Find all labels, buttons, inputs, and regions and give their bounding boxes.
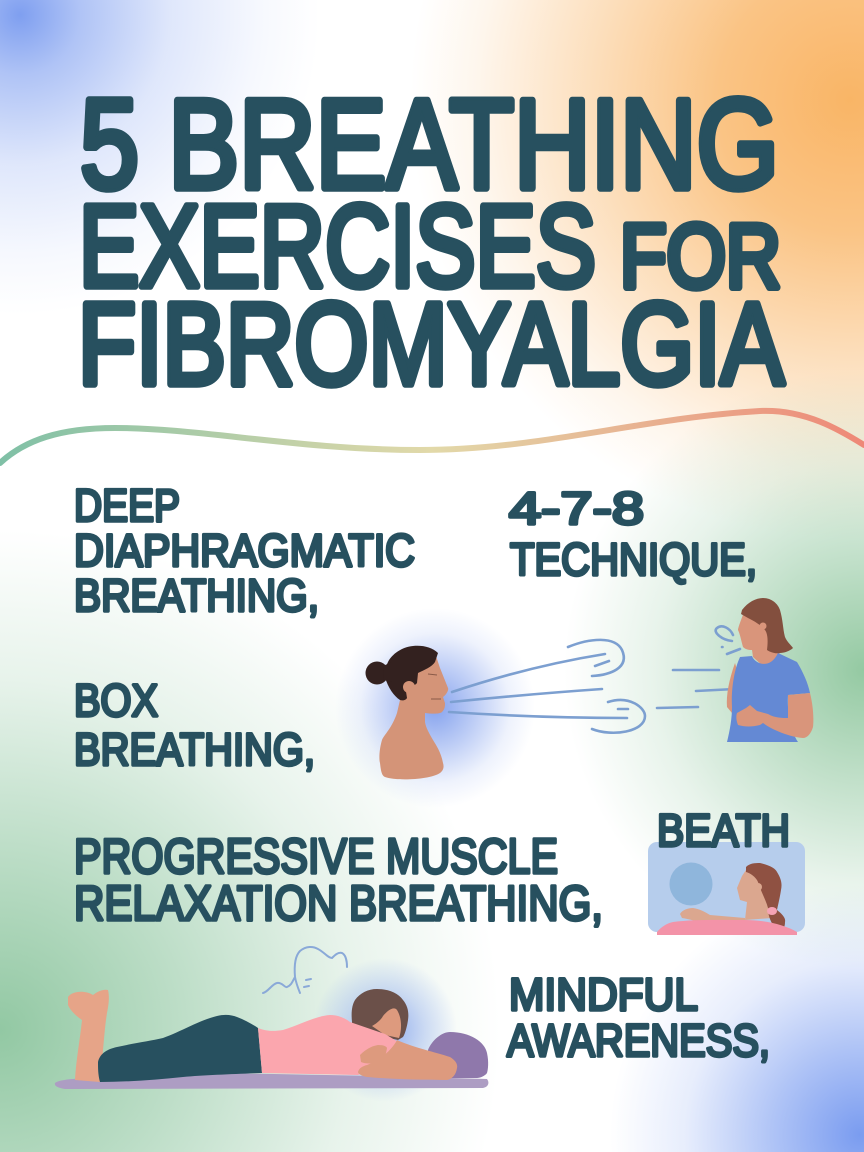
- text: deep diaphragmatic breathing: DEEP: [74, 480, 180, 531]
- text: box breathing: [74, 675, 315, 775]
- text: mindful awareness: MINDFUL: [509, 969, 698, 1020]
- illustration: woman lying prone on mat: [55, 989, 488, 1089]
- wave divider: [0, 411, 864, 463]
- text: mindful awareness: [507, 969, 770, 1066]
- text: beath: BEATH: [657, 805, 790, 856]
- illustration: beath panel with woman and circle: [648, 842, 805, 935]
- text: progressive muscle relaxation breathing: [74, 830, 603, 931]
- text: 4-7-8 technique: 4-7-8: [509, 483, 644, 534]
- text: mindful awareness: AWARENESS,: [507, 1015, 770, 1066]
- title: EXERCISES: [79, 181, 596, 311]
- text: box breathing: BREATHING,: [74, 724, 315, 775]
- text: 4-7-8 technique: TECHNIQUE,: [510, 534, 757, 585]
- text: progressive muscle relaxation breathing: PROGRESSIVE MUSCLE: [74, 830, 558, 884]
- text: deep diaphragmatic breathing: [74, 480, 415, 621]
- text: 4-7-8 technique: [509, 483, 757, 585]
- title: [78, 73, 785, 409]
- text: progressive muscle relaxation breathing: RELAXATION BREATHING,: [74, 877, 603, 931]
- text: deep diaphragmatic breathing: BREATHING,: [74, 570, 319, 621]
- text: deep diaphragmatic breathing: DIAPHRAGMATIC: [74, 525, 415, 576]
- illustration: woman with hand on belly: [727, 598, 813, 742]
- illustration: person in profile breathing out: [366, 646, 448, 779]
- title: FOR: [620, 207, 781, 307]
- squiggle: breath cloud above lying figure: [263, 947, 347, 993]
- breath lines: [449, 626, 740, 733]
- text: box breathing: BOX: [74, 675, 158, 726]
